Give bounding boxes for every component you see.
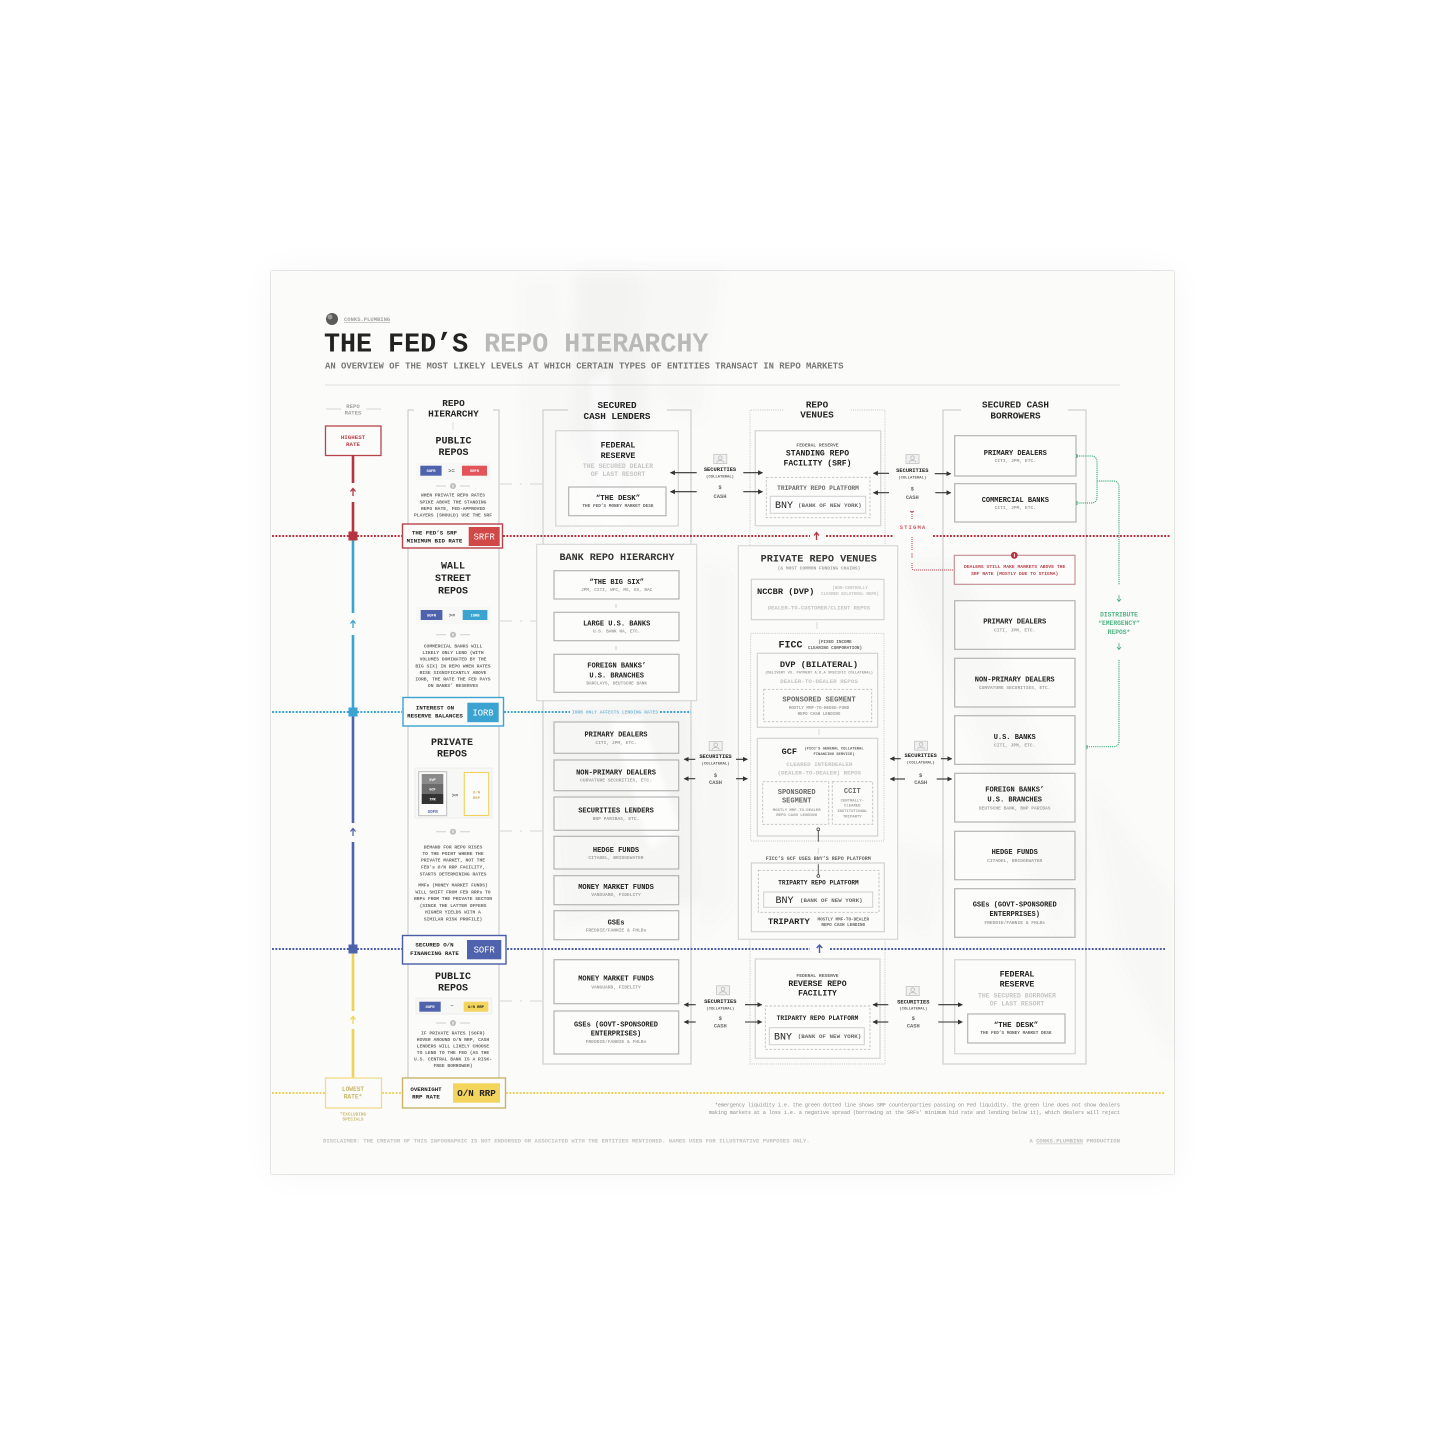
flow labels: middle right [890, 741, 952, 786]
gses govt sponsored: ENTERPRISES) [591, 1031, 641, 1039]
section: private repos: DVP [429, 779, 436, 783]
repo rates label [326, 403, 381, 416]
connector: gcf to bny platform: FICC’S GCF USES BNY’S REPO PLATFORM [766, 856, 871, 862]
flow labels: bottom right [873, 986, 962, 1029]
arrow: red up to srf [814, 532, 819, 540]
flow labels: bottom left: (COLLATERAL) [706, 1006, 734, 1011]
dvp bilateral: SPONSORED SEGMENT [782, 696, 856, 704]
non-primary dealers [554, 760, 679, 791]
money market funds [554, 960, 679, 1004]
primary dealers: CITI, JPM, ETC. [994, 628, 1035, 634]
gcf: GCF [782, 747, 797, 757]
highest rate box [326, 426, 381, 456]
flow labels: bottom right: SECURITIES [897, 999, 930, 1005]
the desk [968, 1014, 1065, 1043]
flow labels: middle left: $ [714, 772, 718, 779]
panel: repo rates axis [326, 403, 382, 1122]
panel: private borrowers [955, 601, 1075, 937]
primary dealers: CITI, JPM, ETC. [595, 740, 637, 746]
dvp bilateral: REPO CASH LENDING [798, 713, 841, 717]
gcf: TRIPARTY [843, 815, 862, 819]
panel: reverse repo facility: TRIPARTY REPO PLATFORM [777, 1015, 859, 1022]
column frame: secured cash lenders [543, 400, 691, 1064]
rate box: SOFR: SECURED O/N [415, 942, 454, 949]
us banks: U.S. BANKS [994, 734, 1036, 742]
disclaimer: DISCLAIMER: THE CREATOR OF THIS INFOGRAPHIC IS NOT ENDORSED OR ASSOCIATED WITH THE ENTITIES MENTIONED. NAMES USED FOR ILLUSTRATIVE PURPOSES ONLY. [323, 1138, 810, 1145]
emergency repos green line: “EMERGENCY” [1098, 620, 1140, 627]
lowest rate box: SPECIALS [342, 1118, 364, 1122]
flow labels: top left: SECURITIES [704, 467, 737, 473]
dvp bilateral [757, 653, 878, 727]
gses: ENTERPRISES) [989, 911, 1040, 919]
section: public repos o/n rrp: IF PRIVATE RATES (SOFR) [421, 1030, 485, 1036]
flow labels: middle left: (COLLATERAL) [701, 761, 730, 766]
flow labels: bottom right: CASH [907, 1023, 920, 1029]
rate box: SOFR: SOFR [474, 946, 495, 956]
ficc [751, 633, 884, 841]
hedge funds: CITADEL, BRIDGEWATER [588, 855, 644, 861]
section: private repos: O/N [473, 790, 481, 796]
flow labels: bottom right: $ [912, 1015, 916, 1022]
highest rate box: HIGHEST [341, 434, 366, 441]
non-primary dealers: CURVATURE SECURITIES, ETC. [979, 685, 1051, 691]
section: wall street repos: ON BANKS’ RESERVES [428, 683, 478, 689]
repo rates label: REPO [346, 403, 360, 410]
lowest rate box: *EXCLUDING [340, 1112, 367, 1118]
column frame: repo venues: REPO [806, 399, 829, 410]
bny [770, 496, 866, 513]
foreign banks [955, 773, 1075, 822]
hedge funds: CITADEL, BRIDGEWATER [987, 858, 1043, 864]
non-primary dealers: NON-PRIMARY DEALERS [576, 769, 656, 777]
panel: standing repo facility: FACILITY (SRF) [784, 460, 852, 469]
dotted rate lines [272, 536, 1171, 1093]
section: wall street repos: SOFR [427, 614, 437, 618]
section: private repos: (SINCE THE LATTER OFFERS [420, 903, 487, 909]
big six: JPM, CITI, WFC, MS, GS, BAC [581, 588, 653, 593]
section: private repos: RRPs FROM THE PRIVATE SECTOR [414, 896, 492, 902]
us banks: CITI, JPM, ETC. [994, 742, 1035, 748]
gcf: CLEARED [844, 805, 861, 809]
flow labels: middle right: CASH [914, 780, 927, 786]
panel: federal reserve lender [556, 431, 678, 526]
footnote: making markets at a loss i.e. a negative spread (borrowing at the SRFs’ minimum bid rate and lending below it), which dealers will reject [709, 1110, 1120, 1116]
logo: CONKS.PLUMBING [344, 316, 391, 323]
rate box: SOFR [402, 936, 506, 964]
gcf: FINANCING SERVICE) [813, 752, 855, 757]
dvp bilateral: DEALER-TO-DEALER REPOS [780, 678, 858, 685]
vertical rate line [348, 455, 358, 1078]
nccbr: NCCBR (DVP) [757, 587, 814, 597]
foreign banks [554, 654, 679, 692]
primary dealers: PRIMARY DEALERS [584, 732, 648, 740]
rate box: SOFR: FINANCING RATE [410, 950, 459, 957]
panel: reverse repo facility: FEDERAL RESERVE [796, 973, 839, 979]
section: public repos srfr: >= [448, 468, 455, 475]
triparty: TRIPARTY [768, 917, 810, 927]
triparty: MOSTLY MMF-TO-DEALER [818, 918, 870, 922]
us banks [955, 716, 1075, 764]
large us banks: LARGE U.S. BANKS [583, 621, 650, 629]
lowest rate box: LOWEST [342, 1086, 364, 1093]
gcf: INSTITUTIONAL [837, 810, 868, 814]
panel: federal reserve borrower: RESERVE [1000, 980, 1034, 989]
gcf: SEGMENT [782, 797, 811, 805]
gcf: CCIT [844, 788, 861, 796]
ficc: FICC [778, 641, 803, 652]
primary dealers: CITI, JPM, ETC. [995, 458, 1036, 464]
arrow: indigo up [817, 945, 822, 953]
panel: federal reserve lender: RESERVE [601, 452, 635, 461]
rate box: O/N RRP: RRP RATE [412, 1094, 440, 1101]
section: private repos: REPOS [437, 750, 467, 760]
panel: private repo venues: (& MOST COMMON FUNDING CHAINS) [778, 565, 860, 571]
section: wall street repos: COMMERCIAL BANKS WILL [424, 644, 482, 650]
flow labels: top left: (COLLATERAL) [706, 474, 734, 479]
large us banks: U.S. BANK NA, ETC. [593, 630, 640, 634]
panel: repo hierarchy column: HIERARCHY [428, 408, 479, 420]
flow labels: middle left: CASH [709, 780, 722, 786]
column frame: secured cash lenders: SECURED [597, 400, 637, 411]
nccbr [751, 579, 884, 620]
bny: BNY [775, 501, 793, 512]
footnote [709, 1103, 1120, 1116]
money market funds: MONEY MARKET FUNDS [578, 884, 654, 892]
callout: dealers still make markets: SRF RATE (MOSTLY DUE TO STIGMA) [971, 571, 1058, 577]
panel: federal reserve lender: OF LAST RESORT [591, 471, 645, 478]
flow labels: middle right: (COLLATERAL) [907, 761, 935, 766]
section: wall street repos [415, 561, 491, 689]
column frame: repo venues [750, 399, 885, 1064]
panel: standing repo facility: FEDERAL RESERVE [796, 443, 839, 449]
securities lenders [554, 797, 679, 830]
commercial banks: CITI, JPM, ETC. [995, 505, 1036, 511]
primary dealers: PRIMARY DEALERS [984, 450, 1047, 458]
panel: federal reserve borrower: FEDERAL [1000, 970, 1034, 979]
section: wall street repos: LIKELY ONLY LEND (WITH [422, 650, 484, 656]
non-primary dealers [955, 658, 1075, 707]
column frame: secured cash borrowers [943, 399, 1086, 1064]
flow labels: middle left: SECURITIES [699, 754, 732, 760]
column frame: secured cash lenders: CASH LENDERS [584, 411, 651, 422]
emergency repos green line [1077, 454, 1140, 749]
the desk: THE FED’S MONEY MARKET DESK [980, 1031, 1052, 1036]
securities lenders: BNP PARIBAS, ETC. [593, 816, 639, 822]
gcf [757, 738, 878, 836]
panel: repo hierarchy column [402, 398, 506, 1108]
panel: federal reserve lender: FEDERAL [601, 442, 635, 451]
foreign banks: FOREIGN BANKS’ [985, 786, 1044, 794]
gcf: (DEALER-TO-DEALER) REPOS [778, 770, 862, 777]
foreign banks: DEUTSCHE BANK, BNP PARIBAS [979, 806, 1051, 812]
bny [769, 1028, 864, 1045]
section: public repos srfr: REPO RATE, FED-APPROVED [421, 506, 485, 512]
foreign banks: BARCLAYS, DEUTSCHE BANK [586, 682, 647, 686]
primary dealers [955, 436, 1076, 476]
gses govt sponsored: GSEs (GOVT-SPONSORED [574, 1021, 658, 1029]
panel: bank repo hierarchy: BANK REPO HIERARCHY [559, 553, 675, 564]
non-primary dealers: CURVATURE SECURITIES, ETC. [580, 778, 652, 784]
section: public repos srfr: PLAYERS (SHOULD) USE THE SRF [414, 513, 492, 519]
flow labels: top right: SECURITIES [896, 468, 929, 474]
flow labels: middle right: $ [919, 772, 923, 779]
panel: reverse repo facility [755, 959, 880, 1058]
section: private repos: HIGHER YIELDS WITH A [425, 910, 481, 916]
section: public repos srfr: PUBLIC [435, 436, 472, 447]
section: public repos o/n rrp: TO LEND TO THE FED (AS THE [417, 1050, 489, 1056]
nccbr: (NON-CENTRALLY [832, 586, 868, 591]
section: public repos srfr: WHEN PRIVATE REPO RATES [421, 493, 485, 499]
flow labels: bottom left: CASH [714, 1023, 727, 1029]
flow labels: top left: $ [718, 484, 722, 491]
foreign banks: FOREIGN BANKS’ [587, 663, 646, 671]
panel: federal reserve borrower: THE SECURED BORROWER [978, 992, 1056, 1000]
flow labels: bottom right: (COLLATERAL) [899, 1007, 927, 1012]
column frame: secured cash borrowers: SECURED CASH [982, 399, 1049, 410]
section: private repos: >= [452, 792, 459, 799]
section: wall street repos: RISE SIGNIFICANTLY ABOVE [420, 670, 487, 676]
section: public repos srfr: SOFR [426, 470, 436, 474]
gses: FREDDIE/FANNIE & FHLBs [586, 928, 647, 934]
panel: reverse repo facility: REVERSE REPO [788, 980, 847, 989]
section: public repos o/n rrp: ~ [450, 1002, 454, 1010]
gcf: CENTRALLY- [841, 799, 864, 803]
column frame: secured cash borrowers: BORROWERS [990, 410, 1041, 422]
big six [554, 571, 679, 599]
rate box: O/N RRP [402, 1078, 506, 1108]
panel: private repo venues [323, 436, 1140, 1145]
panel: public borrowers [955, 436, 1076, 522]
emergency repos green line: REPOS* [1108, 629, 1131, 636]
section: private repos: PRIVATE [431, 738, 473, 749]
rate box: O/N RRP: OVERNIGHT [410, 1086, 442, 1093]
flow labels: top right: (COLLATERAL) [898, 475, 926, 480]
poster sheet [271, 271, 1174, 1174]
triparty: BNY [776, 896, 794, 907]
logo [326, 313, 391, 325]
flow labels: bottom left [684, 986, 762, 1029]
triparty [751, 863, 884, 932]
panel: private repo venues: PRIVATE REPO VENUES [761, 554, 877, 566]
hedge funds [955, 831, 1075, 880]
large us banks [554, 612, 679, 641]
gses [955, 889, 1075, 937]
flow labels: bottom left: SECURITIES [704, 999, 737, 1005]
nccbr: CLEARED BILATERAL REPO) [821, 592, 879, 597]
highest rate box: RATE [346, 441, 360, 448]
panel: repo hierarchy column: REPO [442, 398, 465, 409]
flow labels: top right [874, 454, 951, 501]
flow labels: middle left [684, 742, 747, 786]
money market funds: MONEY MARKET FUNDS [578, 976, 654, 984]
rate box: IORB: IORB [472, 708, 494, 718]
the desk [569, 487, 666, 516]
gcf: (FICC’S GENERAL COLLATERAL [804, 747, 864, 752]
gcf: SPONSORED [778, 789, 816, 797]
ficc: (FIXED INCOME [818, 640, 852, 645]
note: iorb lending rates: IORB ONLY AFFECTS LENDING RATES [572, 710, 658, 716]
section: private repos [414, 738, 492, 923]
section: private repos: MMFs (MONEY MARKET FUNDS) [418, 883, 488, 889]
panel: standing repo facility [755, 431, 881, 526]
lowest rate box: RATE* [344, 1094, 363, 1100]
the desk: “THE DESK” [994, 1022, 1038, 1030]
lowest rate box [326, 1078, 382, 1122]
panel: federal reserve borrower: OF LAST RESORT [990, 1000, 1044, 1008]
gses [554, 911, 679, 940]
commercial banks [955, 484, 1076, 522]
flow labels: top right: CASH [906, 495, 919, 501]
rate box: SRFR [402, 524, 502, 548]
money market funds: VANGUARD, FIDELITY [591, 892, 641, 898]
flow labels: top right: $ [911, 485, 915, 492]
triparty: TRIPARTY REPO PLATFORM [778, 879, 859, 886]
panel: standing repo facility: STANDING REPO [786, 450, 849, 459]
section: wall street repos: VOLUMES DOMINATED BY THE [420, 657, 487, 663]
big six: “THE BIG SIX” [589, 579, 644, 587]
connector: gcf to bny platform [766, 828, 871, 877]
commercial banks: COMMERCIAL BANKS [982, 497, 1049, 505]
bny: (BANK OF NEW YORK) [798, 1033, 861, 1040]
section: public repos o/n rrp: HOVER AROUND O/N RRP, CASH [417, 1037, 489, 1043]
foreign banks: U.S. BRANCHES [589, 672, 644, 680]
dvp bilateral: MOSTLY MMF-TO-HEDGE-FUND [789, 707, 850, 711]
section: public repos o/n rrp: FREE BORROWER) [434, 1063, 472, 1069]
rate box: IORB [403, 698, 504, 726]
panel: federal reserve borrower [955, 960, 1075, 1054]
section: public repos srfr: SRFR [470, 470, 480, 474]
panel: federal reserve lender: THE SECURED DEALER [583, 463, 653, 470]
section: public repos srfr: SPIKE ABOVE THE STANDING [420, 499, 487, 505]
gcf: REPO CASH LENDING [776, 814, 818, 818]
hedge funds [554, 836, 679, 869]
rate box: IORB: RESERVE BALANCES [407, 713, 463, 720]
securities lenders: SECURITIES LENDERS [578, 808, 654, 816]
section: private repos: GCF [429, 788, 436, 792]
panel: private lenders [554, 722, 679, 940]
money market funds [554, 876, 679, 905]
section: public repos srfr [414, 436, 492, 519]
rate box: SRFR: SRFR [474, 532, 495, 542]
repo rates label: RATES [345, 410, 362, 416]
panel: standing repo facility: TRIPARTY REPO PLATFORM [777, 485, 859, 492]
primary dealers [955, 601, 1075, 649]
bny: (BANK OF NEW YORK) [798, 502, 862, 509]
section: private repos: SIMILAR RISK PROFILE) [424, 917, 482, 923]
footnote: *emergency liquidity i.e. the green dotted line shows SRF counterparties passing on Fed liquidity. the green line does not show dealers [715, 1103, 1120, 1109]
section: private repos: STARTS DETERMINING RATES [420, 871, 487, 877]
header [324, 313, 1120, 385]
title: THE FED’S REPO HIERARCHY [324, 330, 708, 360]
dvp bilateral: (DELIVERY VS. PAYMENT A.K.A SPECIFIC COLLATERAL) [765, 671, 873, 676]
section: public repos o/n rrp: SOFR [425, 1006, 435, 1010]
section: private repos: TO THE POINT WHERE THE [422, 851, 484, 857]
flow labels: middle right: SECURITIES [905, 753, 938, 759]
panel: reverse repo facility: FACILITY [798, 990, 837, 999]
gses: FREDDIE/FANNIE & FHLBs [984, 920, 1045, 926]
brush texture background [520, 272, 1174, 1060]
section: private repos: PRIVATE MARKET, NOT THE [421, 858, 485, 864]
section: public repos o/n rrp: LENDERS WILL LIKELY CHOOSE [417, 1044, 489, 1050]
triparty: (BANK OF NEW YORK) [800, 897, 863, 904]
the desk: “THE DESK” [596, 495, 640, 503]
dvp bilateral: DVP (BILATERAL) [780, 660, 858, 670]
gses govt sponsored: FREDDIE/FANNIE & FHLBs [586, 1039, 647, 1045]
section: wall street repos: STREET [435, 574, 471, 585]
gses: GSEs (GOVT-SPONSORED [973, 902, 1057, 910]
section: wall street repos: IORB, THE RATE THE FED PAYS [415, 676, 491, 682]
money market funds: VANGUARD, FIDELITY [591, 984, 641, 990]
primary dealers: PRIMARY DEALERS [983, 619, 1046, 627]
section: public repos o/n rrp: O/N RRP [468, 1005, 485, 1010]
section: public repos o/n rrp: PUBLIC [435, 972, 471, 983]
foreign banks: U.S. BRANCHES [987, 797, 1042, 805]
section: private repos: TPR [429, 798, 437, 802]
section: private repos: SOFR [428, 811, 438, 815]
hedge funds: HEDGE FUNDS [593, 847, 639, 855]
emergency repos green line: DISTRIBUTE [1100, 611, 1138, 618]
rate box: IORB: INTEREST ON [416, 705, 455, 712]
section: private repos: FED’s O/N RRP FACILITY, [421, 865, 485, 871]
flow labels: bottom left: $ [719, 1015, 723, 1022]
panel: bank repo hierarchy [537, 544, 697, 701]
triparty: REPO CASH LENDING [821, 923, 866, 928]
section: public repos o/n rrp: U.S. CENTRAL BANK IS A RISK- [414, 1057, 492, 1063]
flow labels: top left: CASH [714, 494, 726, 500]
callout: dealers still make markets: DEALERS STILL MAKE MARKETS ABOVE THE [964, 564, 1066, 570]
gcf: CLEARED INTERDEALER [786, 761, 853, 768]
stigma: STIGMA [900, 524, 926, 531]
panel: public lenders [554, 960, 679, 1054]
rate box: SRFR: THE FED’S SRF [412, 530, 458, 536]
section: private repos: DEMAND FOR REPO RISES [424, 844, 482, 850]
bny: BNY [774, 1032, 792, 1044]
dashed connectors: hierarchy to lenders [500, 484, 542, 1001]
section: wall street repos: REPOS [438, 586, 468, 597]
hedge funds: HEDGE FUNDS [992, 849, 1038, 857]
section: private repos: WILL SHIFT FROM FED RRPs TO [415, 889, 491, 895]
stigma [900, 512, 954, 570]
rate box: O/N RRP: O/N RRP [457, 1088, 496, 1099]
column frame: repo venues: VENUES [800, 410, 834, 421]
section: public repos o/n rrp: REPOS [438, 984, 468, 995]
the desk: THE FED’S MONEY MARKET DESK [582, 504, 654, 509]
gses govt sponsored [554, 1011, 679, 1054]
section: wall street repos: >= [449, 612, 456, 619]
ficc: CLEARING CORPORATION) [808, 646, 862, 651]
callout: dealers still make markets [954, 552, 1075, 584]
flow labels: top left [670, 454, 762, 500]
non-primary dealers: NON-PRIMARY DEALERS [975, 676, 1055, 684]
gses: GSEs [608, 919, 624, 927]
section: private repos: RRP [473, 797, 481, 801]
rate box: SRFR: MINIMUM BID RATE [407, 538, 463, 544]
nccbr: DEALER-TO-CUSTOMER/CLIENT REPOS [768, 604, 871, 612]
gcf: MOSTLY MMF-TO-DEALER [773, 809, 821, 813]
section: wall street repos: IORB [470, 614, 480, 618]
production credit: A CONKS.PLUMBING PRODUCTION [1029, 1138, 1120, 1145]
section: public repos srfr: REPOS [438, 448, 469, 459]
section: public repos o/n rrp [414, 972, 492, 1069]
subtitle: AN OVERVIEW OF THE MOST LIKELY LEVELS AT WHICH CERTAIN TYPES OF ENTITIES TRANSACT IN REPO MARKETS [325, 361, 844, 371]
section: wall street repos: BIG SIX) IN REPO WHEN RATES [415, 663, 491, 669]
primary dealers [554, 722, 679, 753]
section: wall street repos: WALL [441, 561, 465, 572]
